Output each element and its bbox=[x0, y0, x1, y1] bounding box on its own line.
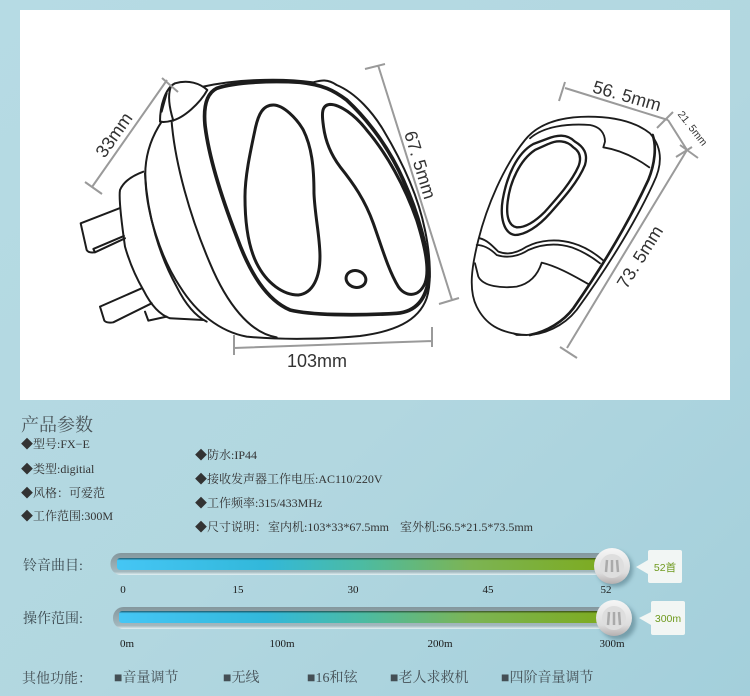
spec list: left column bbox=[21, 436, 113, 523]
spec list: right column: ◆接收发声器工作电压:AC110/220V bbox=[195, 471, 383, 486]
value callout: 300m: 300m bbox=[655, 613, 681, 625]
other functions row: ■老人求救机 bbox=[390, 669, 468, 686]
slider tick labels: 0m bbox=[120, 638, 134, 650]
value callout: 52 songs bbox=[636, 550, 682, 583]
dimension: 21.5mm: 21. 5mm bbox=[675, 109, 710, 149]
dimension: 67.5mm bbox=[365, 64, 459, 304]
slider track bbox=[110, 553, 610, 575]
remote transmitter drawing bbox=[472, 117, 660, 335]
label: ringtone count: 铃音曲目: bbox=[23, 558, 83, 574]
dimension: 103mm: 103mm bbox=[287, 351, 347, 371]
dimension: 73.5mm bbox=[560, 147, 692, 358]
slider tick labels: 30 bbox=[348, 584, 359, 596]
slider tick labels: 100m bbox=[269, 638, 295, 650]
dimension: 21.5mm bbox=[668, 109, 710, 158]
slider tick labels: 52 bbox=[600, 584, 612, 596]
indoor plug unit drawing bbox=[81, 80, 430, 339]
slider knob bbox=[596, 600, 636, 640]
spec list: right column bbox=[195, 447, 534, 534]
slider tick labels: 300m bbox=[599, 638, 625, 650]
other functions row bbox=[22, 669, 593, 687]
slider tick labels bbox=[120, 584, 612, 596]
value callout: 52 songs: 52首 bbox=[654, 561, 676, 574]
dimension: 67.5mm: 67. 5mm bbox=[400, 129, 440, 201]
other functions row: ■四阶音量调节 bbox=[501, 669, 593, 686]
spec list: left column: ◆类型:digitial bbox=[21, 461, 95, 476]
dimension: 56.5mm: 56. 5mm bbox=[591, 77, 663, 115]
other functions row: ■音量调节 bbox=[114, 669, 178, 686]
slider tick labels: 45 bbox=[482, 584, 494, 596]
spec list: left column: ◆风格：可爱范 bbox=[21, 485, 105, 500]
spec list: left column: ◆型号:FX−E bbox=[21, 436, 90, 451]
dimension: 33mm: 33mm bbox=[91, 109, 137, 161]
dimension: 103mm bbox=[234, 327, 432, 371]
other functions row: ■无线 bbox=[223, 669, 259, 686]
value callout: 300m bbox=[639, 601, 685, 635]
dimension: 56.5mm bbox=[559, 77, 673, 128]
spec list: right column: ◆防水:IP44 bbox=[195, 447, 257, 462]
other functions row: ■16和铉 bbox=[307, 670, 358, 686]
heading: product parameters: 产品参数 bbox=[21, 415, 93, 435]
spec list: right column: ◆尺寸说明： bbox=[195, 519, 267, 534]
slider tick labels bbox=[120, 638, 625, 650]
slider knob bbox=[594, 548, 633, 587]
other functions row: 其他功能： bbox=[22, 670, 92, 687]
spec list: right column: 室内机:103*33*67.5mm bbox=[268, 519, 390, 534]
slider: ringtone count bbox=[23, 548, 682, 596]
slider: operating range bbox=[23, 600, 685, 650]
slider tick labels: 200m bbox=[427, 638, 453, 650]
slider track bbox=[113, 607, 613, 629]
dimension: 33mm bbox=[85, 78, 178, 194]
panel: product line drawings bbox=[20, 10, 730, 400]
spec list: left column: ◆工作范围:300M bbox=[21, 509, 113, 523]
spec list: right column: ◆工作频率:315/433MHz bbox=[195, 495, 322, 510]
label: operating range: 操作范围: bbox=[23, 610, 83, 627]
dimension: 73.5mm: 73. 5mm bbox=[613, 222, 667, 292]
slider tick labels: 0 bbox=[120, 584, 126, 596]
slider tick labels: 15 bbox=[232, 584, 244, 596]
spec list: right column: 室外机:56.5*21.5*73.5mm bbox=[400, 519, 534, 534]
